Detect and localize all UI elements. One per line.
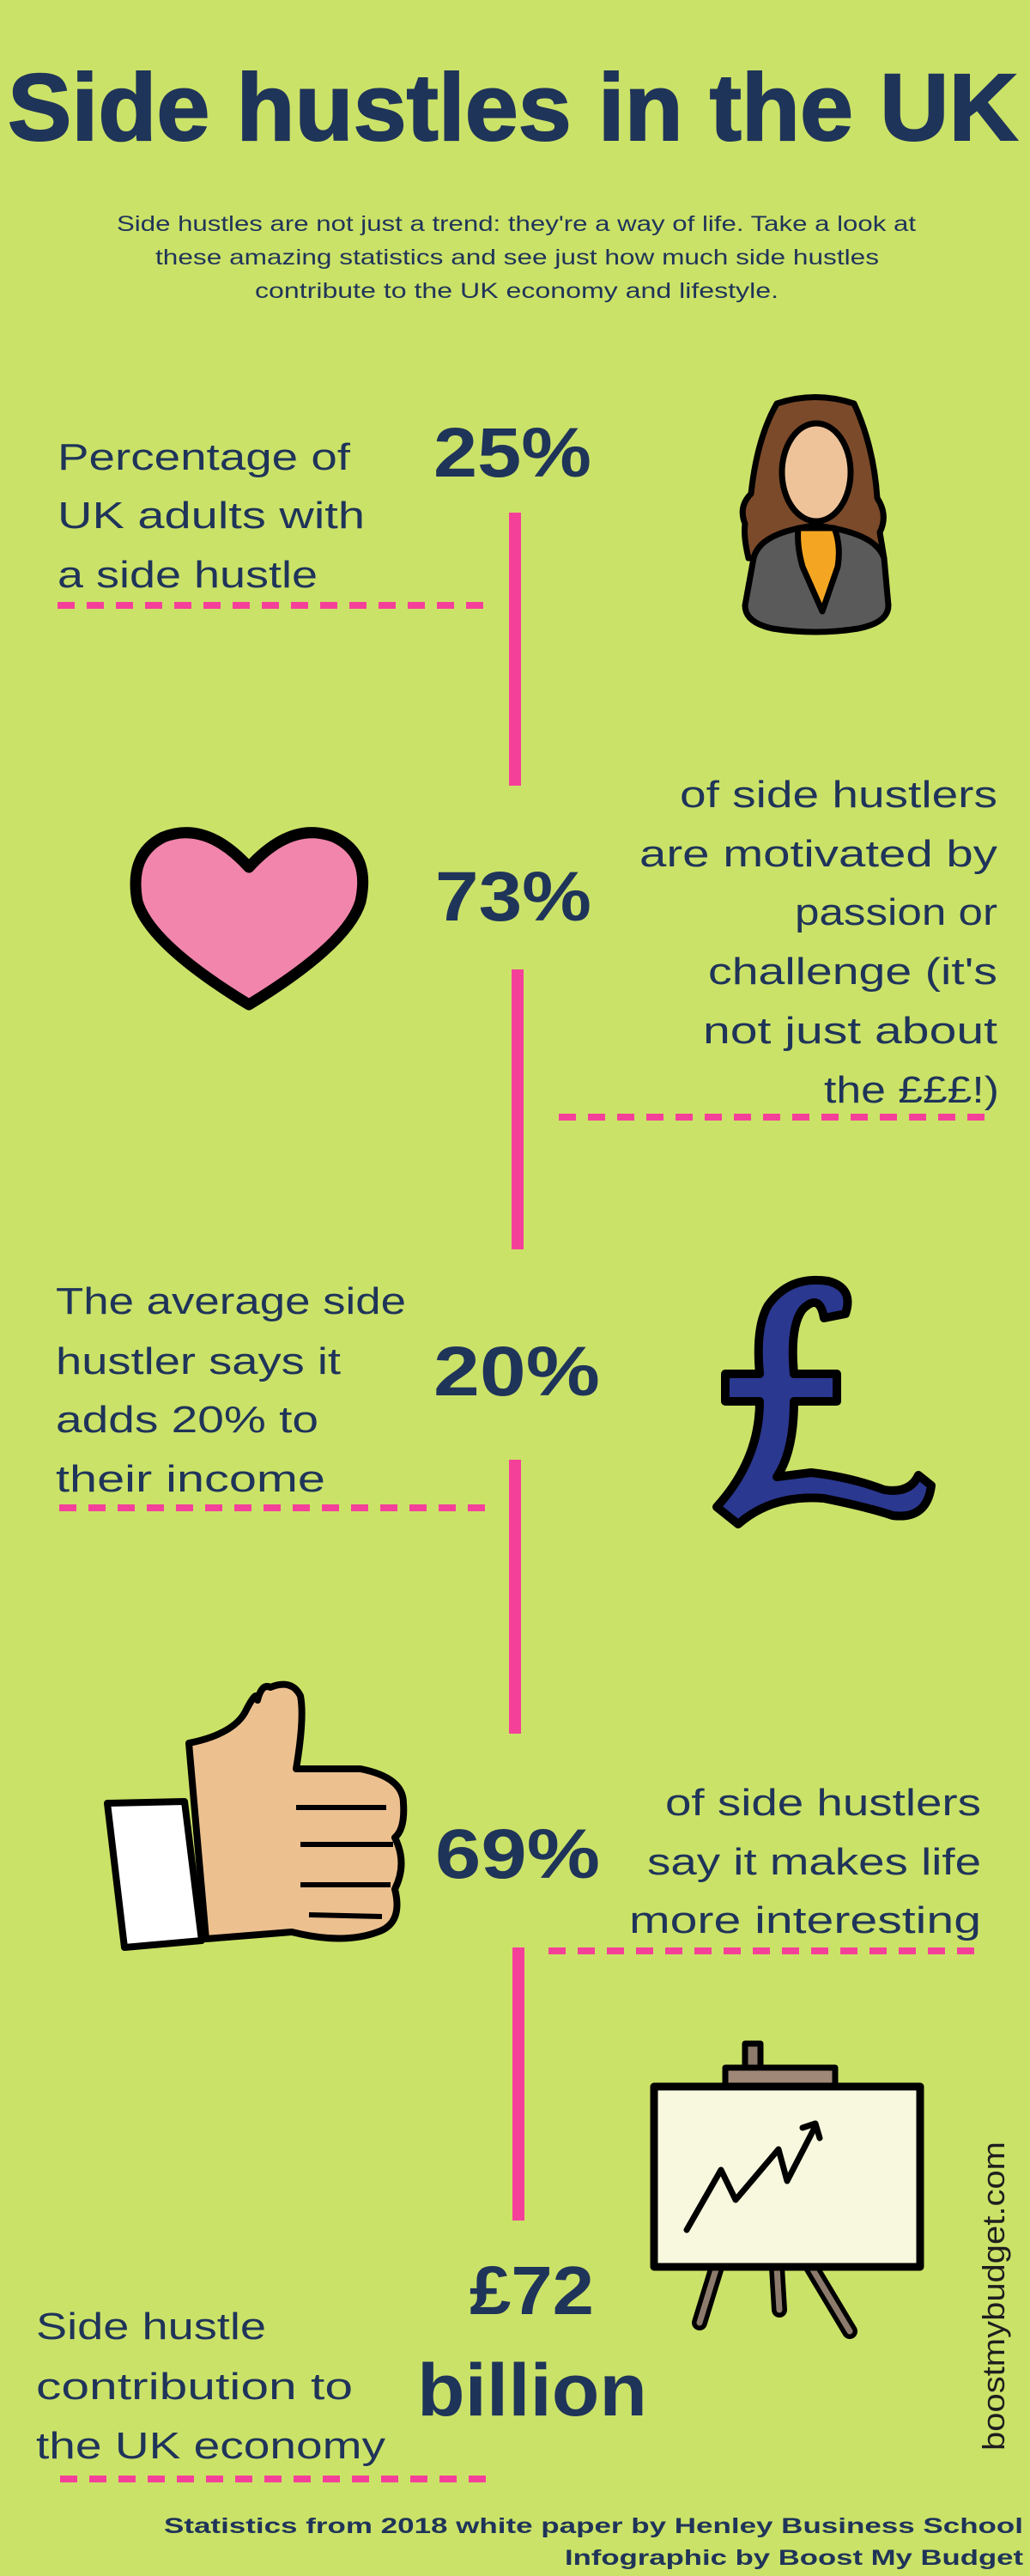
stat 3 text: adds 20% to <box>56 1399 318 1441</box>
stat 1 text: UK adults with <box>58 495 365 537</box>
vertical website label: boostmybudget.com <box>976 2142 1011 2451</box>
stat 2 icon: heart <box>136 833 363 1005</box>
stat 5 number <box>417 2252 647 2432</box>
stat 2 text: not just about <box>703 1010 997 1052</box>
stat 1 text: Percentage of <box>58 436 351 478</box>
stat 3 text <box>56 1280 406 1500</box>
subtitle <box>117 212 916 303</box>
dashed underlines <box>58 605 991 2479</box>
stat 2 text <box>639 774 999 1111</box>
stat 4 text: more interesting <box>629 1899 981 1941</box>
stat 4 text: say it makes life <box>647 1841 981 1883</box>
footer credits: Statistics from 2018 white paper by Henley Business School <box>164 2514 1023 2538</box>
stat 2 text: challenge (it's <box>708 951 997 993</box>
footer credits <box>164 2514 1024 2570</box>
stat 2 number: 73% <box>435 858 591 936</box>
stat 5 number: £72 <box>470 2252 594 2329</box>
stat 2 text: are motivated by <box>639 833 997 875</box>
stat 1 text: a side hustle <box>58 554 318 596</box>
stat 4 text <box>629 1782 981 1941</box>
footer credits: Infographic by Boost My Budget <box>565 2546 1024 2570</box>
stat 4 text: of side hustlers <box>665 1782 981 1824</box>
stat 2 text: the £££!) <box>824 1069 999 1111</box>
title: Side hustles in the UK <box>8 55 1018 161</box>
stat 1 number: 25% <box>433 414 591 492</box>
stat 3 number: 20% <box>433 1333 600 1411</box>
stat 3 text: The average side <box>56 1280 406 1322</box>
icon: woman <box>742 397 888 632</box>
stat 3 text: their income <box>56 1458 325 1500</box>
subtitle: contribute to the UK economy and lifestyle. <box>255 279 779 303</box>
icon: easel chart <box>654 2044 920 2331</box>
stat 3 text: hustler says it <box>56 1340 341 1382</box>
stat 2 text: passion or <box>795 891 997 933</box>
icon: pound sign <box>717 1280 931 1524</box>
subtitle: these amazing statistics and see just how much side hustles <box>155 246 879 270</box>
stat 5 number: billion <box>417 2349 647 2432</box>
stat 5 text: contribution to <box>36 2366 353 2408</box>
timeline lines <box>509 513 524 2221</box>
stat 5 text: Side hustle <box>36 2306 266 2348</box>
icon: thumbs up <box>107 1685 403 1947</box>
stat 5 text: the UK economy <box>36 2425 385 2467</box>
stat 4 number: 69% <box>435 1815 600 1893</box>
stat 1 text <box>58 436 365 596</box>
stat 5 text <box>36 2306 385 2467</box>
stat 2 text: of side hustlers <box>680 774 997 816</box>
subtitle: Side hustles are not just a trend: they're a way of life. Take a look at <box>117 212 916 236</box>
